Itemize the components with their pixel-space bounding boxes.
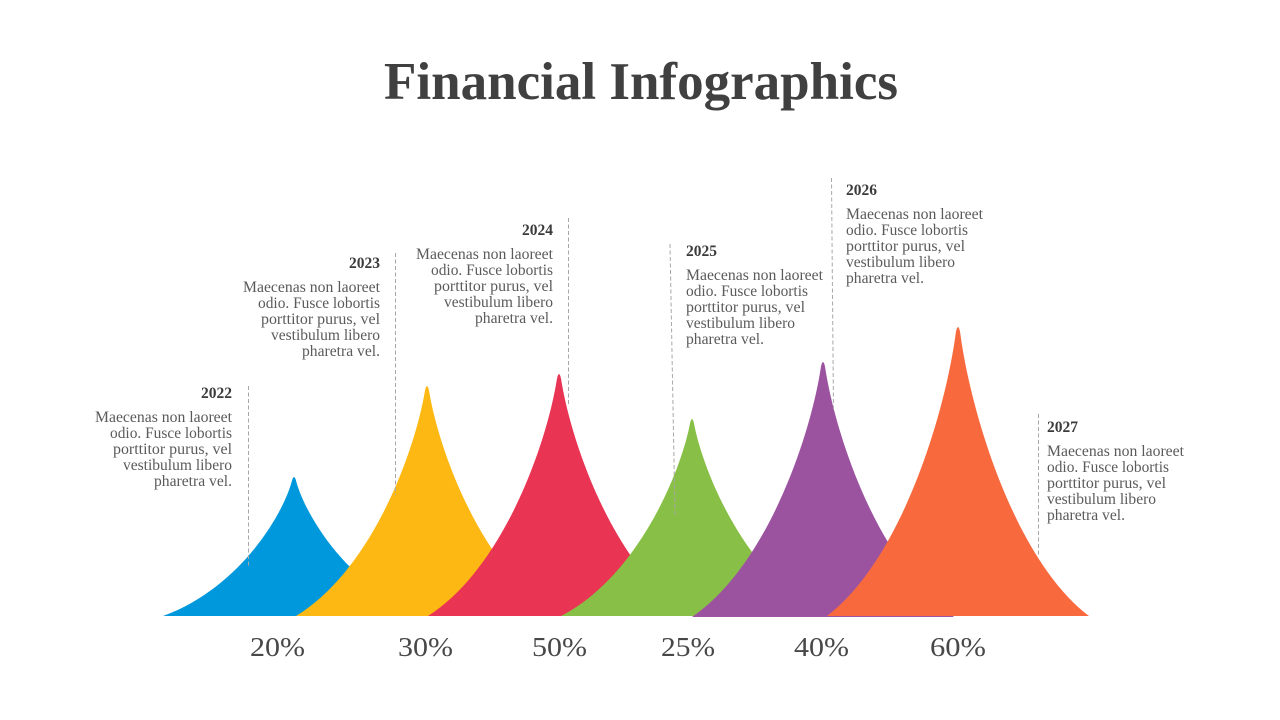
percentage labels [250,631,986,662]
text block: 2024 [416,222,554,327]
percentage labels: 30% [398,631,453,662]
text block: 2023: 2023 [349,255,380,272]
text block: 2026: vestibulum libero [846,254,955,271]
text block: 2024: 2024 [522,222,553,239]
text block: 2025 [686,243,824,348]
percentage labels: 25% [661,631,715,662]
percentage labels: 60% [930,631,986,662]
chart: overlapping peaks [163,327,1089,617]
text block: 2022: odio. Fusce lobortis [110,425,232,442]
percentage labels: 40% [794,631,849,662]
text block: 2026: pharetra vel. [846,270,924,287]
text block: 2027: pharetra vel. [1047,507,1125,524]
text block: 2026 [846,182,984,287]
text block: 2025: pharetra vel. [686,331,764,348]
text block: 2026: odio. Fusce lobortis [846,222,968,239]
text block: 2022 [95,385,233,490]
text block: 2027: odio. Fusce lobortis [1047,459,1169,476]
text block: 2023: odio. Fusce lobortis [258,295,380,312]
peak: 2023 yellow [296,386,558,616]
text block: 2022: pharetra vel. [154,473,232,490]
percentage labels: 50% [532,631,587,662]
peak: 2024 red [428,374,690,616]
text block: 2024: Maecenas non laoreet [416,246,554,263]
text block: 2022: vestibulum libero [123,457,232,474]
text block: 2025: porttitor purus, vel [686,299,805,316]
text block: 2024: vestibulum libero [444,294,553,311]
text block: 2023: vestibulum libero [271,327,380,344]
leader lines [248,178,1038,567]
title: Financial Infographics [384,53,898,111]
text block: 2027: vestibulum libero [1047,491,1156,508]
text block: 2024: porttitor purus, vel [434,278,553,295]
text block: 2026: Maecenas non laoreet [846,206,984,223]
text block: 2026: porttitor purus, vel [846,238,965,255]
text block: 2022: Maecenas non laoreet [95,409,233,426]
peak: 2022 blue [163,477,425,616]
text block: 2023: Maecenas non laoreet [243,279,381,296]
text block: 2023: porttitor purus, vel [261,311,380,328]
text block: 2027 [1047,419,1185,524]
text block: 2025: 2025 [686,243,717,260]
text block: 2022: porttitor purus, vel [113,441,232,458]
percentage labels: 20% [250,631,305,662]
text block: 2025: odio. Fusce lobortis [686,283,808,300]
text block: 2026: 2026 [846,182,877,199]
peak: 2027 orange [827,327,1089,616]
text block: 2027: Maecenas non laoreet [1047,443,1185,460]
text block: 2024: odio. Fusce lobortis [431,262,553,279]
text block: 2022: 2022 [201,385,232,402]
text block: 2025: Maecenas non laoreet [686,267,824,284]
text block: 2025: vestibulum libero [686,315,795,332]
text block: 2023 [243,255,381,360]
text block: 2027: porttitor purus, vel [1047,475,1166,492]
text block: 2023: pharetra vel. [302,343,380,360]
text block: 2024: pharetra vel. [475,310,553,327]
peak: 2025 green [561,419,823,616]
text block: 2027: 2027 [1047,419,1078,436]
peak: 2026 purple [692,362,954,617]
